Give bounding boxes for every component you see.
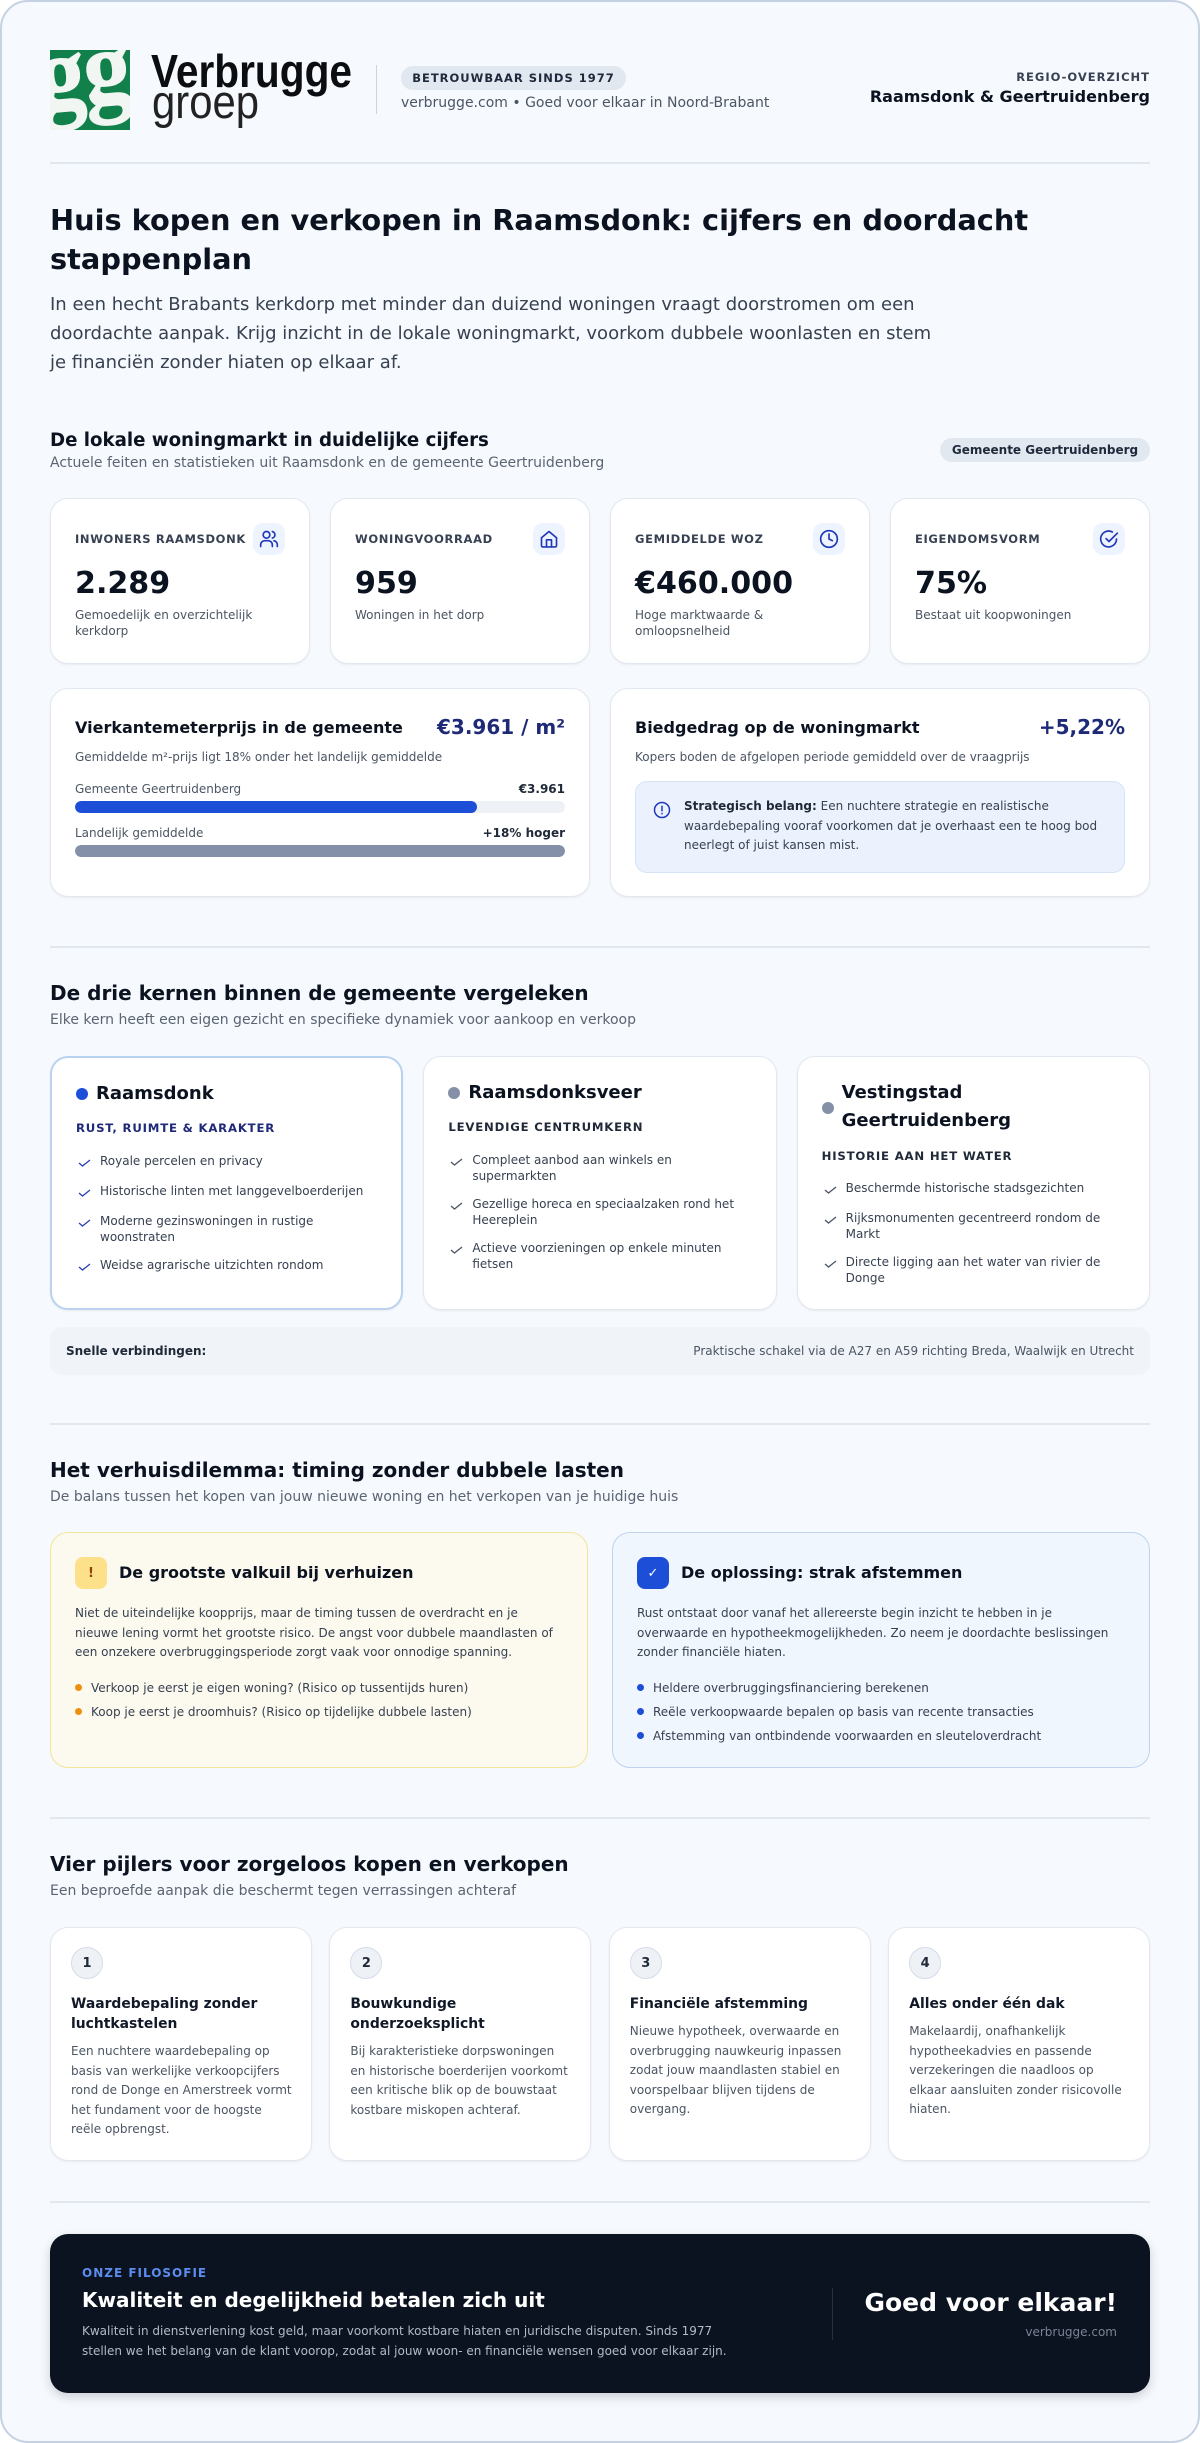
panel: vierkantemeterprijs: Landelijk gemiddelde	[75, 826, 203, 840]
icon: check	[637, 1557, 669, 1589]
pillar 3	[609, 1927, 871, 2161]
panel: Vestingstad Geertruidenberg: Markt	[846, 1227, 880, 1241]
panel: biedgedrag	[610, 688, 1150, 897]
panel: Raamsdonk: woonstraten	[100, 1230, 175, 1244]
panel: Raamsdonk: Moderne gezinswoningen in rustige	[100, 1214, 313, 1228]
stat card: eigendomsvorm: 75%	[915, 566, 987, 601]
intro text: In een hecht Brabants kerkdorp met minder dan duizend woningen vraagt doorstromen om een	[50, 294, 915, 315]
heading: vier pijlers: Vier pijlers voor zorgeloos kopen en verkopen	[50, 1852, 569, 1876]
pillar 4: verzekeringen die naadloos op	[909, 2063, 1094, 2077]
stat card: eigendomsvorm	[890, 498, 1150, 664]
panel: Raamsdonk	[50, 1056, 403, 1310]
panel: oplossing	[612, 1532, 1150, 1768]
panel: Vestingstad Geertruidenberg: Geertruidenberg	[842, 1110, 1011, 1131]
callout: strategisch belang	[635, 781, 1125, 873]
panel: biedgedrag: Kopers boden de afgelopen periode gemiddeld over de vraagprijs	[635, 750, 1030, 764]
panel: Raamsdonk: Historische linten met langgevelboerderijen	[100, 1184, 363, 1198]
panel: onze filosofie: Kwaliteit en degelijkheid betalen zich uit	[82, 2288, 545, 2312]
stat card: woningvoorraad: 959	[355, 566, 418, 601]
stat card: gemiddelde woz: omloopsnelheid	[635, 624, 730, 638]
panel: Vestingstad Geertruidenberg: Vestingstad	[842, 1082, 962, 1103]
panel: Raamsdonksveer: Heereplein	[472, 1213, 537, 1227]
panel: valkuil	[50, 1532, 588, 1768]
heading: drie kernen: De drie kernen binnen de gemeente vergeleken	[50, 981, 589, 1005]
subheading: lokale woningmarkt: Actuele feiten en statistieken uit Raamsdonk en de gemeente Geertruidenberg	[50, 455, 604, 471]
pill: gemeente geertruidenberg: Gemeente Geertruidenberg	[952, 443, 1138, 457]
pillar 2: Bij karakteristieke dorpswoningen	[350, 2044, 554, 2058]
pillar 2: een kritische blik op de bouwstaat	[350, 2083, 557, 2097]
panel: onze filosofie: verbrugge.com	[1025, 2325, 1117, 2339]
pillar 3: overbrugging nauwkeurig inpassen	[630, 2044, 841, 2058]
stat card: inwoners: Gemoedelijk en overzichtelijk	[75, 608, 252, 622]
bar: snelle verbindingen: Praktische schakel via de A27 en A59 richting Breda, Waalwijk en Utrecht	[693, 1344, 1134, 1358]
pillar 2	[329, 1927, 591, 2161]
pillar 4: elkaar aansluiten zonder risicovolle	[909, 2082, 1122, 2096]
panel: oplossing: Rust ontstaat door vanaf het allereerste begin inzicht te hebben in je	[637, 1606, 1052, 1620]
stat card: woningvoorraad	[330, 498, 590, 664]
stat card: inwoners: kerkdorp	[75, 624, 128, 638]
panel: valkuil: Koop je eerst je droomhuis? (Risico op tijdelijke dubbele lasten)	[91, 1705, 472, 1719]
panel: Raamsdonksveer: Gezellige horeca en speciaalzaken rond het	[472, 1197, 734, 1211]
heading: verhuisdilemma: Het verhuisdilemma: timing zonder dubbele lasten	[50, 1458, 624, 1482]
pillar 1: basis van werkelijke verkoopcijfers	[71, 2064, 280, 2078]
icon: warning: !	[88, 1566, 94, 1580]
icon: people	[253, 523, 285, 555]
panel: oplossing: zonder financiële hiaten.	[637, 1645, 786, 1659]
panel: Raamsdonksveer: Raamsdonksveer	[468, 1082, 642, 1103]
subheading: drie kernen: Elke kern heeft een eigen gezicht en specifieke dynamiek voor aankoop en verkoop	[50, 1012, 636, 1028]
header right: regio-overzicht: REGIO-OVERZICHT	[1016, 70, 1150, 84]
pillar 4: hypotheekadvies en passende	[909, 2044, 1092, 2058]
icon: check circle	[1093, 523, 1125, 555]
panel: Vestingstad Geertruidenberg	[797, 1056, 1150, 1310]
pillar 3: Financiële afstemming	[630, 1996, 808, 2012]
stat card: gemiddelde woz: €460.000	[635, 566, 793, 601]
panel: valkuil: Verkoop je eerst je eigen woning? (Risico op tussentijds huren)	[91, 1681, 468, 1695]
callout: strategisch belang: waardebepaling vooraf voorkomen dat je overhaast een te hoog bod	[684, 818, 1097, 832]
intro text: je financiën zonder hiaten op elkaar af.	[50, 352, 402, 373]
panel: Raamsdonksveer	[423, 1056, 777, 1310]
panel: valkuil: De grootste valkuil bij verhuizen	[119, 1563, 414, 1582]
subheading: verhuisdilemma: De balans tussen het kopen van jouw nieuwe woning en het verkopen van je huidige huis	[50, 1489, 678, 1505]
badge: betrouwbaar sinds 1977	[401, 66, 626, 90]
title	[50, 203, 1028, 276]
panel: onze filosofie: Kwaliteit in dienstverlening kost geld, maar voorkomt kostbare hiaten en juridische disputen. Sinds 1977	[82, 2324, 712, 2338]
panel: Raamsdonksveer: Compleet aanbod aan winkels en	[472, 1153, 672, 1167]
bar: snelle verbindingen	[50, 1327, 1150, 1375]
panel: oplossing: Heldere overbruggingsfinanciering berekenen	[653, 1681, 929, 1695]
panel: vierkantemeterprijs: Gemeente Geertruidenberg	[75, 782, 241, 796]
pillar 3: zodat jouw maandlasten stabiel en	[630, 2063, 840, 2077]
panel: biedgedrag: +5,22%	[1039, 715, 1125, 739]
stat card: inwoners: INWONERS RAAMSDONK	[75, 532, 246, 546]
panel: Raamsdonksveer: Actieve voorzieningen op enkele minuten	[472, 1241, 721, 1255]
panel: oplossing: Reële verkoopwaarde bepalen op basis van recente transacties	[653, 1705, 1034, 1719]
panel: Vestingstad Geertruidenberg: Rijksmonumenten gecentreerd rondom de	[846, 1211, 1100, 1225]
panel: onze filosofie: Goed voor elkaar!	[864, 2288, 1117, 2317]
panel: Vestingstad Geertruidenberg: Directe ligging aan het water van rivier de	[846, 1255, 1100, 1269]
header tagline: verbrugge.com • Goed voor elkaar in Noord-Brabant	[401, 95, 769, 111]
pillar 1: luchtkastelen	[71, 2016, 177, 2032]
pillar 1: Een nuchtere waardebepaling op	[71, 2044, 270, 2058]
stat card: inwoners: 2.289	[75, 566, 170, 601]
pillar 2: onderzoeksplicht	[350, 2016, 485, 2032]
pillar 4: hiaten.	[909, 2102, 951, 2116]
bar: gemeente	[75, 801, 565, 813]
panel: oplossing: Afstemming van ontbindende voorwaarden en sleuteloverdracht	[653, 1729, 1041, 1743]
stat card: gemiddelde woz: GEMIDDELDE WOZ	[635, 532, 764, 546]
icon: clock	[813, 523, 845, 555]
logo: Verbrugge groep	[50, 50, 352, 130]
panel: Raamsdonksveer: fietsen	[472, 1257, 513, 1271]
stat card: eigendomsvorm: Bestaat uit koopwoningen	[915, 608, 1071, 622]
icon: alert	[654, 802, 670, 818]
subheading: vier pijlers: Een beproefde aanpak die beschermt tegen verrassingen achteraf	[50, 1883, 516, 1899]
icon: warning	[75, 1557, 107, 1589]
stat card: woningvoorraad: Woningen in het dorp	[355, 608, 484, 622]
pillar 2: en historische boerderijen voorkomt	[350, 2064, 568, 2078]
pillar 3: 3	[641, 1956, 650, 1970]
panel: onze filosofie	[50, 2234, 1150, 2393]
panel: vierkantemeterprijs: Vierkantemeterprijs in de gemeente	[75, 718, 403, 737]
callout: strategisch belang: neerlegt of juist kansen mist.	[684, 838, 859, 852]
panel: onze filosofie: stellen we het belang van de klant voorop, zodat al jouw woon- en financiële wensen goed voor elkaar zijn.	[82, 2344, 727, 2358]
intro text: doordachte aanpak. Krijg inzicht in de lokale woningmarkt, voorkom dubbele woonlasten en stem	[50, 323, 931, 344]
icon: check: ✓	[648, 1566, 658, 1580]
pillar 3: overgang.	[630, 2102, 690, 2116]
panel: biedgedrag: Biedgedrag op de woningmarkt	[635, 718, 919, 737]
pillar 1: het fundament voor de hoogste	[71, 2102, 262, 2116]
panel: Vestingstad Geertruidenberg: Donge	[846, 1271, 885, 1285]
pillar 4: 4	[921, 1956, 930, 1970]
pillar 3: voorspelbaar blijven tijdens de	[630, 2082, 815, 2096]
panel: onze filosofie: ONZE FILOSOFIE	[82, 2266, 207, 2280]
title: Huis kopen en verkopen in Raamsdonk: cijfers en doordacht	[50, 203, 1028, 237]
panel: Raamsdonk: Royale percelen en privacy	[100, 1154, 263, 1168]
bar: snelle verbindingen: Snelle verbindingen:	[66, 1344, 206, 1358]
pillar 3: Nieuwe hypotheek, overwaarde en	[630, 2024, 839, 2038]
panel: oplossing: overwaarde en hypotheekmogelijkheden. Zo neem je doordachte beslissingen	[637, 1626, 1108, 1640]
panel: vierkantemeterprijs: €3.961 / m²	[437, 715, 565, 739]
pillar 2: Bouwkundige	[350, 1996, 456, 2012]
bar: landelijk	[75, 845, 565, 857]
callout: strategisch belang: Strategisch belang: Een nuchtere strategie en realistische	[684, 799, 1049, 813]
icon: house	[533, 523, 565, 555]
pillar 2: 2	[362, 1956, 371, 1970]
panel: Raamsdonk: RUST, RUIMTE & KARAKTER	[76, 1121, 275, 1135]
panel: vierkantemeterprijs: €3.961	[519, 782, 565, 796]
panel: oplossing: De oplossing: strak afstemmen	[681, 1563, 962, 1582]
pill: gemeente geertruidenberg	[940, 438, 1150, 462]
panel: valkuil: nieuwe lening vormt het grootste risico. De angst voor dubbele maandlasten of	[75, 1626, 553, 1640]
pillar 1	[50, 1927, 312, 2161]
header right: regio-overzicht	[870, 70, 1150, 106]
panel: Vestingstad Geertruidenberg: HISTORIE AAN HET WATER	[822, 1149, 1012, 1163]
pillar 1: rond de Donge en Amerstreek vormt	[71, 2083, 292, 2097]
pillar 4	[888, 1927, 1150, 2161]
logo: Verbrugge groep: groep	[152, 75, 259, 128]
panel: vierkantemeterprijs: Gemiddelde m²-prijs ligt 18% onder het landelijk gemiddelde	[75, 750, 442, 764]
pillar 1: reële opbrengst.	[71, 2122, 170, 2136]
pillar 4: Makelaardij, onafhankelijk	[909, 2024, 1065, 2038]
header right: regio-overzicht: Raamsdonk & Geertruidenberg	[870, 87, 1150, 106]
pillar 4: Alles onder één dak	[909, 1996, 1065, 2012]
panel: Vestingstad Geertruidenberg: Beschermde historische stadsgezichten	[846, 1181, 1084, 1195]
pillar 1: 1	[82, 1956, 92, 1970]
panel: Raamsdonksveer: supermarkten	[472, 1169, 557, 1183]
badge: betrouwbaar sinds 1977: BETROUWBAAR SINDS 1977	[412, 71, 615, 85]
panel: Raamsdonksveer: LEVENDIGE CENTRUMKERN	[448, 1120, 643, 1134]
stat card: woningvoorraad: WONINGVOORRAAD	[355, 532, 493, 546]
pillar 2: kostbare miskopen achteraf.	[350, 2102, 521, 2116]
panel: vierkantemeterprijs	[50, 688, 590, 897]
stat card: gemiddelde woz: Hoge marktwaarde &	[635, 608, 763, 622]
panel: Raamsdonk: Raamsdonk	[96, 1083, 214, 1104]
panel: vierkantemeterprijs: +18% hoger	[483, 826, 565, 840]
panel: valkuil: een onzekere overbruggingsperiode zorgt vaak voor onnodige spanning.	[75, 1645, 512, 1659]
heading: lokale woningmarkt: De lokale woningmarkt in duidelijke cijfers	[50, 430, 489, 451]
intro text	[50, 294, 931, 373]
stat card: eigendomsvorm: EIGENDOMSVORM	[915, 532, 1040, 546]
stat card: inwoners	[50, 498, 310, 664]
panel: valkuil: Niet de uiteindelijke koopprijs, maar de timing tussen de overdracht en je	[75, 1606, 518, 1620]
stat card: gemiddelde woz	[610, 498, 870, 664]
panel: Raamsdonk: Weidse agrarische uitzichten rondom	[100, 1258, 323, 1272]
pillar 1: Waardebepaling zonder	[71, 1996, 257, 2012]
title: stappenplan	[50, 242, 252, 276]
